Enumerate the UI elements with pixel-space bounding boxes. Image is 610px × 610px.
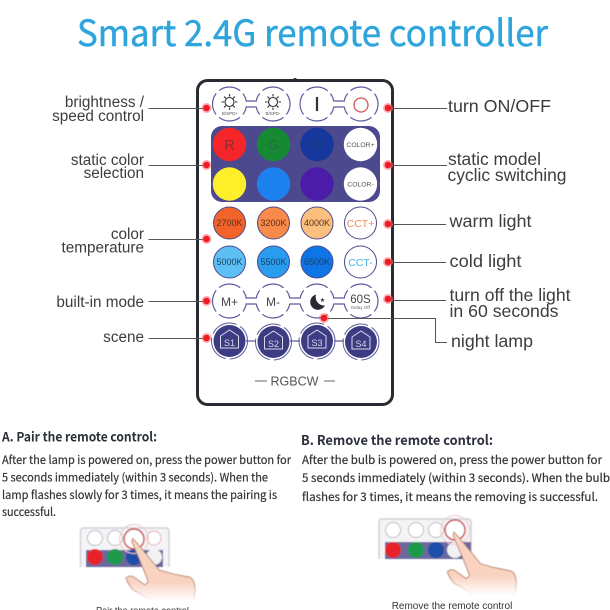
warm temperature buttons: CCT+ [347, 218, 374, 230]
text block: remove instructions: 5 seconds immediately (within 3 seconds). When the bulb [302, 470, 610, 486]
left labels: color [111, 226, 144, 243]
right labels [448, 96, 571, 351]
left labels: static color [71, 152, 144, 169]
cool temperature buttons: 5500K [260, 257, 287, 267]
leader lines [148, 108, 447, 342]
text block: remove instructions: After the bulb is powered on, press the power button for [302, 452, 603, 468]
colour button: yellow [213, 167, 246, 201]
left labels [52, 94, 145, 346]
colour button: COLOR+ [344, 128, 377, 161]
model label [255, 374, 335, 388]
mode buttons: 60S [350, 294, 371, 306]
text block: remove instructions: flashes for 3 times, it means the removing is successful. [302, 489, 598, 505]
mode buttons: M- [266, 295, 280, 309]
mode buttons [212, 284, 378, 318]
colour button: COLOR- [344, 167, 377, 201]
left labels: speed control [52, 108, 144, 125]
left labels: selection [84, 165, 144, 182]
left labels: brightness / [65, 94, 145, 111]
warm temperature buttons: 4000K [304, 218, 330, 228]
text block: remove instructions [301, 429, 610, 505]
text block: remove instructions: B. Remove the remote control: [301, 429, 493, 449]
colour button: purple [300, 167, 334, 201]
colour button: COLOR-: COLOR- [347, 182, 374, 188]
right labels: cyclic switching [448, 165, 566, 185]
scene buttons: S3 [311, 338, 323, 348]
cool temperature buttons: CCT- [348, 257, 373, 269]
scene buttons: S4 [355, 339, 367, 349]
scene buttons [212, 323, 379, 360]
callout markers [202, 103, 393, 343]
scene buttons: S2 [268, 339, 279, 349]
text block: pair instructions [1, 426, 292, 520]
colour button: R: R [224, 136, 235, 152]
text block: pair instructions: After the lamp is powered on, press the power button for [2, 452, 292, 468]
cool temperature buttons: 6500K [304, 257, 330, 267]
icon: moon [310, 294, 325, 310]
colour button: light blue [257, 167, 290, 201]
title: Smart 2.4G remote controller [77, 5, 549, 57]
panel: remote control [198, 78, 392, 404]
cool temperature buttons: 5000K [216, 257, 243, 267]
right labels: static model [448, 149, 541, 169]
illustration: pair the remote [80, 524, 195, 600]
scene buttons: S1 [224, 338, 235, 348]
colour button: G: G [268, 136, 279, 152]
text block: pair instructions: A. Pair the remote control: [1, 426, 157, 446]
panel: static colour buttons [211, 126, 380, 202]
warm temperature buttons: 3200K [260, 218, 287, 228]
right labels: warm light [448, 211, 532, 231]
cool temperature buttons [214, 246, 376, 278]
colour button: G [257, 128, 290, 161]
text block: pair instructions: successful. [2, 504, 56, 520]
remote body [198, 78, 392, 404]
left labels: built-in mode [56, 294, 144, 311]
text block: pair instructions: lamp flashes slowly for 3 times, it means the pairing is [2, 487, 277, 503]
button row: brightness and power [212, 87, 378, 121]
colour button: COLOR+: COLOR+ [346, 142, 375, 149]
model label: RGBCW [271, 374, 319, 388]
colour button: R [213, 128, 246, 161]
right labels: turn off the light [450, 285, 571, 305]
right labels: in 60 seconds [450, 301, 559, 321]
warm temperature buttons [214, 207, 376, 239]
mode buttons: M+ [221, 295, 238, 309]
colour button: B [300, 128, 334, 161]
panel: remote control: B/SPD+ [222, 111, 238, 116]
right labels: night lamp [451, 331, 533, 351]
warm temperature buttons: 2700K [216, 218, 243, 228]
mode buttons: Delay Off [351, 305, 371, 310]
panel: remote control: B/SPD- [265, 111, 281, 116]
right labels: cold light [450, 251, 522, 271]
illustration: remove the remote [379, 516, 516, 594]
icon: moon: ★ [320, 297, 325, 304]
right labels: turn ON/OFF [448, 96, 551, 116]
left labels: scene [103, 329, 144, 346]
colour button: B: B [312, 136, 322, 152]
left labels: temperature [62, 240, 144, 256]
text block: pair instructions: 5 seconds immediately (within 3 seconds). When the [2, 470, 268, 486]
